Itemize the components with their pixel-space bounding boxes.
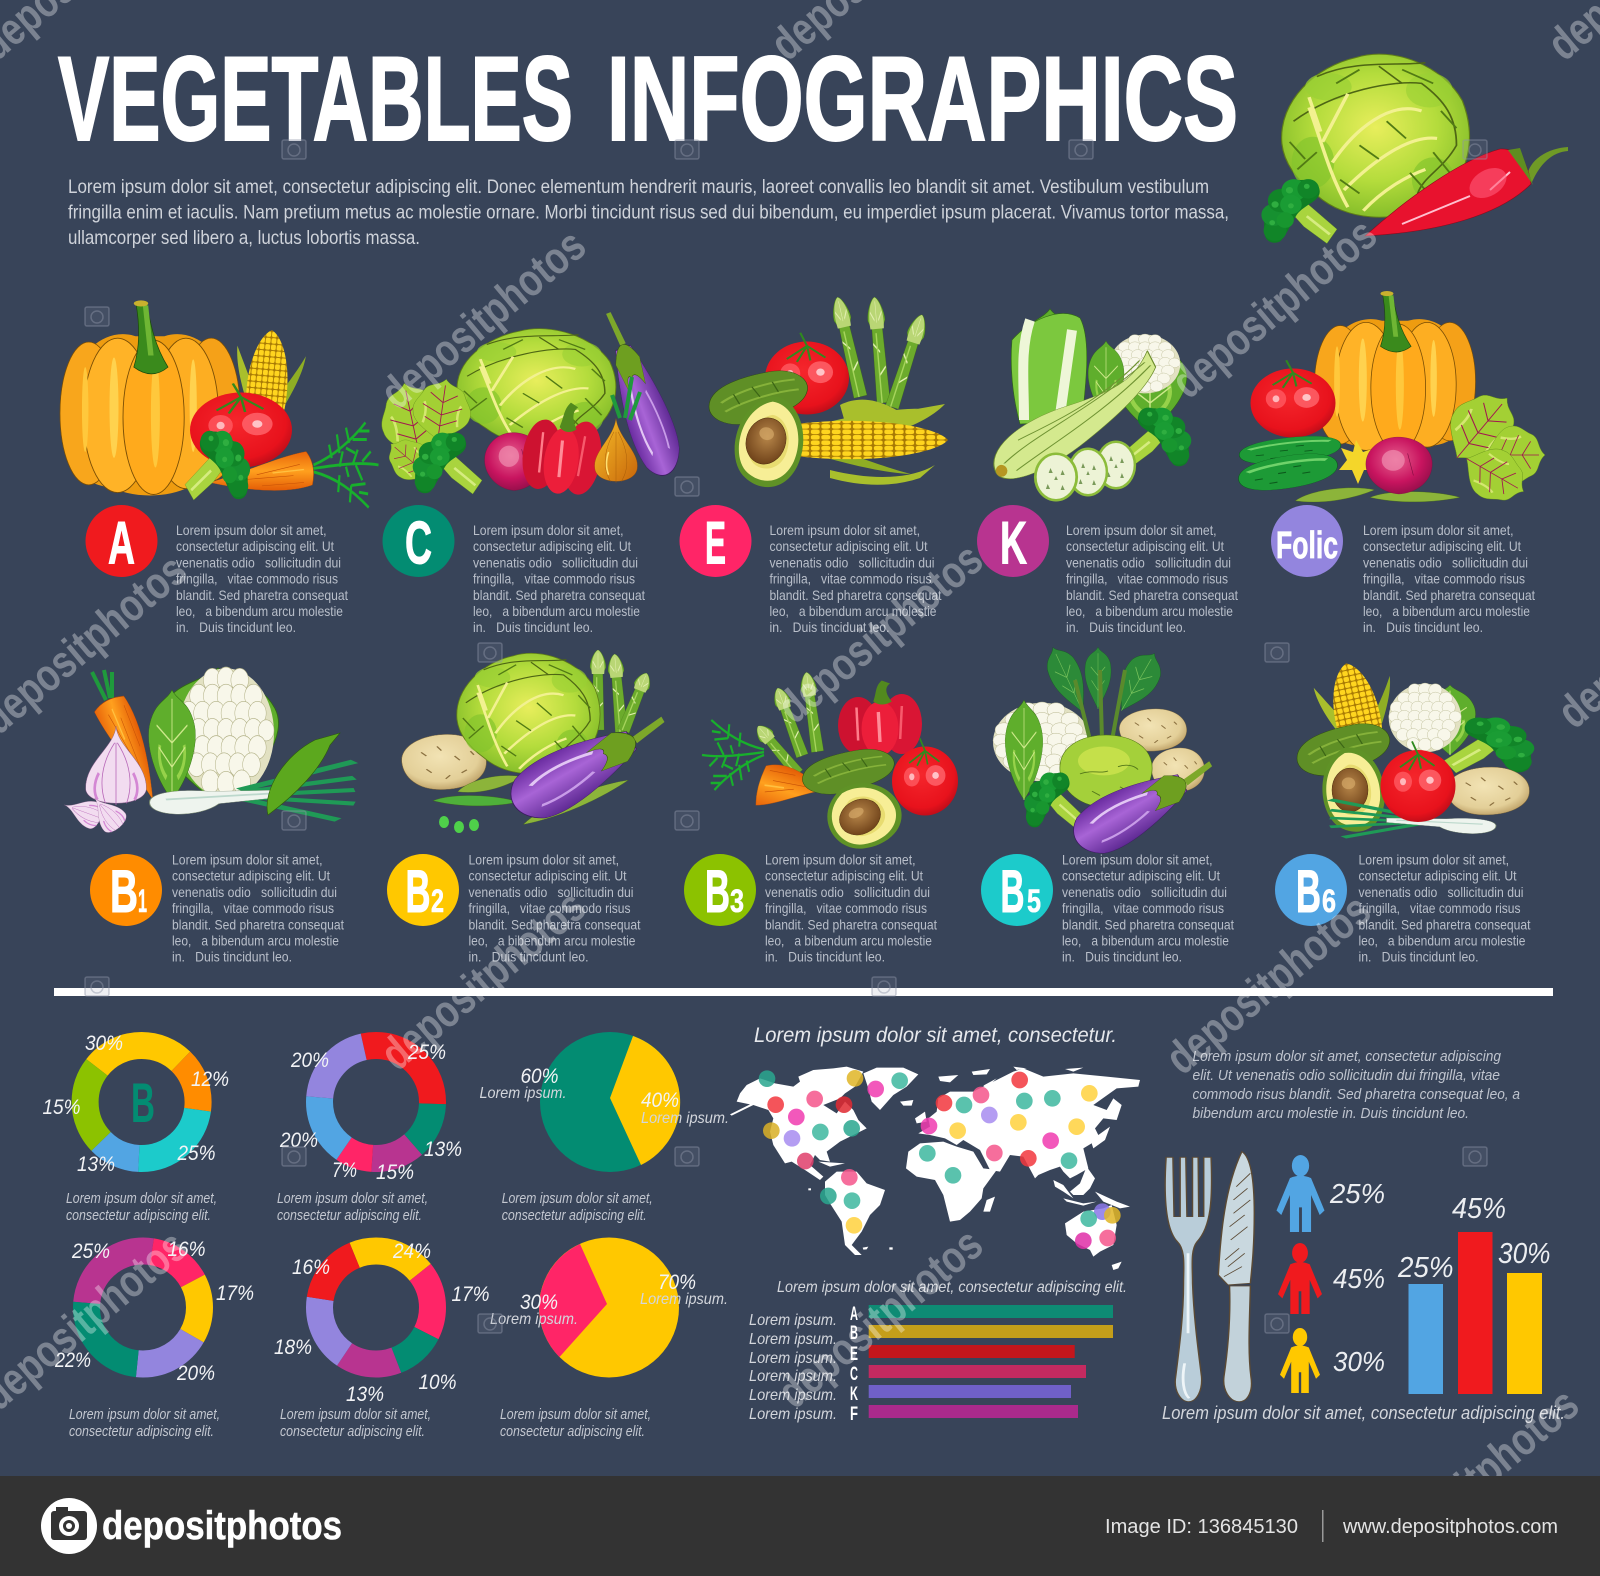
pie chart 2: 30% bbox=[520, 1291, 558, 1314]
horizontal bar chart: Lorem ipsum. bbox=[749, 1406, 837, 1423]
vitamin E text: consectetur adipiscing elit. Ut bbox=[770, 538, 928, 554]
vitamin K text bbox=[1066, 522, 1238, 635]
vegetables group: folic acid bbox=[1236, 291, 1545, 514]
vitamin B1 text: Lorem ipsum dolor sit amet, bbox=[172, 852, 322, 868]
watermark text: depositphotos bbox=[370, 879, 595, 1080]
vitamin B3 text: venenatis odio sollicitudin dui bbox=[765, 884, 930, 900]
pie chart 1: Lorem ipsum. bbox=[480, 1085, 566, 1102]
donut chart 2 caption: consectetur adipiscing elit. bbox=[277, 1208, 422, 1224]
donut chart 2 caption bbox=[277, 1191, 428, 1224]
donut chart 3: 17% bbox=[216, 1282, 254, 1305]
vitamin B2 badge: 2 bbox=[431, 883, 444, 919]
donut chart 1 caption bbox=[66, 1191, 217, 1224]
vitamin B5 text: venenatis odio sollicitudin dui bbox=[1062, 884, 1227, 900]
watermark text: depositphotos bbox=[1155, 883, 1380, 1084]
vitamin A text bbox=[176, 522, 348, 635]
donut chart 4 caption: Lorem ipsum dolor sit amet, bbox=[280, 1407, 431, 1423]
folic acid text: Lorem ipsum dolor sit amet, bbox=[1363, 522, 1514, 538]
footer image id: Image ID: 136845130 bbox=[1105, 1516, 1298, 1538]
world map with coloured dots bbox=[730, 1067, 1140, 1270]
vegetables group: vitamin B3 bbox=[702, 671, 958, 860]
vitamin B2 badge: B bbox=[406, 858, 430, 925]
donut chart 2: 20% bbox=[279, 1129, 318, 1152]
vitamin B3 text: in. Duis tincidunt leo. bbox=[765, 949, 885, 965]
vitamin K badge: K bbox=[1000, 510, 1027, 576]
vitamin B3 text bbox=[765, 852, 937, 965]
donut chart 4: 17% bbox=[452, 1283, 490, 1306]
pie chart 2 caption: Lorem ipsum dolor sit amet, bbox=[500, 1407, 651, 1423]
donut chart 1: vitamin B bbox=[42, 1032, 229, 1176]
donut chart 3 caption: consectetur adipiscing elit. bbox=[69, 1424, 214, 1440]
donut chart 4: 24% bbox=[392, 1240, 431, 1263]
icon: blue person with 25% bbox=[1276, 1155, 1385, 1232]
donut chart 4 bbox=[274, 1240, 490, 1406]
watermark text: depositphotos bbox=[1161, 207, 1386, 408]
donut chart 1: vitamin B: 15% bbox=[42, 1096, 80, 1119]
horizontal bar chart: Lorem ipsum. bbox=[749, 1368, 837, 1385]
pie chart 2: Lorem ipsum. bbox=[490, 1311, 578, 1328]
vitamin B5 text: in. Duis tincidunt leo. bbox=[1062, 949, 1182, 965]
vitamin B6 text: fringilla, vitae commodo risus bbox=[1358, 900, 1520, 916]
vitamin B3 badge: 3 bbox=[730, 883, 744, 919]
vegetables group: vitamin E bbox=[709, 295, 948, 495]
intro paragraph: fringilla enim et iaculis. Nam pretium metus ac molestie ornare. Morbi tincidunt risus sed dui bibendum, eu imperdiet ipsum placerat. Vivamus tortor massa, bbox=[68, 202, 1229, 224]
pie chart 2: 70% bbox=[658, 1271, 696, 1294]
vitamin C badge: C bbox=[405, 510, 432, 576]
vitamin B2 text bbox=[468, 852, 641, 965]
horizontal bar chart bbox=[749, 1279, 1127, 1425]
pie chart 2: Lorem ipsum. bbox=[640, 1291, 728, 1308]
vitamin B1 text: venenatis odio sollicitudin dui bbox=[172, 884, 337, 900]
folic acid text: blandit. Sed pharetra consequat bbox=[1363, 587, 1535, 603]
donut chart 1 caption: Lorem ipsum dolor sit amet, bbox=[66, 1191, 217, 1207]
bottom right caption: Lorem ipsum dolor sit amet, consectetur adipiscing elit. bbox=[1162, 1403, 1565, 1423]
vitamin B3 text: Lorem ipsum dolor sit amet, bbox=[765, 852, 916, 868]
right text block bbox=[1192, 1048, 1520, 1122]
vitamin B1 text: blandit. Sed pharetra consequat bbox=[172, 916, 344, 932]
pie chart 1 caption bbox=[502, 1191, 653, 1224]
folic acid text: leo, a bibendum arcu molestie bbox=[1363, 603, 1530, 619]
vertical bar chart bbox=[1397, 1193, 1550, 1394]
vitamin A text: fringilla, vitae commodo risus bbox=[176, 571, 338, 587]
footer logo bbox=[41, 1498, 342, 1554]
intro paragraph bbox=[68, 176, 1229, 249]
vitamin B5 text: leo, a bibendum arcu molestie bbox=[1062, 932, 1229, 948]
vegetables group: vitamin K bbox=[978, 309, 1191, 502]
vitamin B6 text: venenatis odio sollicitudin dui bbox=[1358, 884, 1524, 900]
pie chart 1: 60% bbox=[520, 1065, 558, 1088]
vitamin E text: Lorem ipsum dolor sit amet, bbox=[770, 522, 920, 538]
vitamin A badge: A bbox=[108, 510, 135, 576]
vitamin B6 text: consectetur adipiscing elit. Ut bbox=[1358, 868, 1517, 884]
illustration: cabbage, chili and broccoli bbox=[1261, 54, 1568, 243]
vitamin A text: in. Duis tincidunt leo. bbox=[176, 619, 296, 635]
vitamin B2 text: consectetur adipiscing elit. Ut bbox=[468, 868, 627, 884]
vitamin A text: venenatis odio sollicitudin dui bbox=[176, 554, 341, 570]
vitamin K text: consectetur adipiscing elit. Ut bbox=[1066, 538, 1224, 554]
vitamin E text: leo, a bibendum arcu molestie bbox=[770, 603, 937, 619]
vitamin B5 badge: B bbox=[1000, 858, 1024, 925]
title: INFOGRAPHICS bbox=[607, 32, 1238, 166]
donut chart 4: 10% bbox=[418, 1371, 456, 1394]
donut chart 3: 16% bbox=[168, 1238, 206, 1261]
donut chart 3 bbox=[54, 1238, 254, 1385]
pie chart 1: 40% bbox=[641, 1089, 679, 1112]
vitamin B3 text: blandit. Sed pharetra consequat bbox=[765, 916, 937, 932]
vitamin B1 text: leo, a bibendum arcu molestie bbox=[172, 932, 339, 948]
horizontal bar chart: A bbox=[850, 1304, 858, 1325]
vitamin B6 badge: B bbox=[1296, 858, 1321, 925]
vitamin E text: blandit. Sed pharetra consequat bbox=[770, 587, 942, 603]
vitamin B1 text: in. Duis tincidunt leo. bbox=[172, 949, 292, 965]
vitamin B5 text: consectetur adipiscing elit. Ut bbox=[1062, 868, 1220, 884]
vitamin B6 text: in. Duis tincidunt leo. bbox=[1358, 949, 1478, 965]
vitamin K text: Lorem ipsum dolor sit amet, bbox=[1066, 522, 1216, 538]
vitamin B2 text: leo, a bibendum arcu molestie bbox=[468, 932, 636, 948]
folic acid text: venenatis odio sollicitudin dui bbox=[1363, 554, 1528, 570]
vitamin B3 badge: B bbox=[705, 858, 730, 925]
vitamin A text: Lorem ipsum dolor sit amet, bbox=[176, 522, 326, 538]
vitamin B1 text bbox=[172, 852, 344, 965]
folic acid badge: Folic bbox=[1276, 525, 1338, 567]
pie chart 2 caption bbox=[500, 1407, 651, 1440]
vitamin B1 badge: B bbox=[110, 858, 138, 925]
donut chart 1 caption: consectetur adipiscing elit. bbox=[66, 1208, 211, 1224]
vitamin B1 text: consectetur adipiscing elit. Ut bbox=[172, 868, 330, 884]
vitamin A text: consectetur adipiscing elit. Ut bbox=[176, 538, 334, 554]
vitamin B2 text: Lorem ipsum dolor sit amet, bbox=[468, 852, 619, 868]
intro paragraph: ullamcorper sed libero a, luctus lobortis massa. bbox=[68, 227, 420, 249]
vitamin E badge: E bbox=[705, 510, 726, 576]
intro paragraph: Lorem ipsum dolor sit amet, consectetur adipiscing elit. Donec elementum hendrerit mauris, laoreet convallis leo blandit sit amet. Vestibulum vestibulum bbox=[68, 176, 1209, 198]
watermark text: depositphotos bbox=[370, 218, 595, 419]
donut chart 4: 18% bbox=[274, 1336, 312, 1359]
right text block: Lorem ipsum dolor sit amet, consectetur adipiscing bbox=[1192, 1048, 1502, 1065]
donut chart 1: vitamin B: 25% bbox=[177, 1142, 216, 1165]
horizontal bar chart: Lorem ipsum dolor sit amet, consectetur adipiscing elit. bbox=[777, 1279, 1127, 1296]
donut chart 3: 20% bbox=[176, 1362, 215, 1385]
vitamin B2 badge bbox=[387, 854, 459, 926]
donut chart 1: vitamin B: 30% bbox=[85, 1032, 123, 1055]
folic acid text: consectetur adipiscing elit. Ut bbox=[1363, 538, 1521, 554]
footer logo: depositphotos bbox=[102, 1504, 342, 1548]
vegetables group: vitamin B6 bbox=[1297, 655, 1534, 837]
vitamin K text: in. Duis tincidunt leo. bbox=[1066, 619, 1186, 635]
vitamin B2 text: blandit. Sed pharetra consequat bbox=[468, 916, 641, 932]
donut chart 3 caption bbox=[69, 1407, 220, 1440]
vitamin C text: venenatis odio sollicitudin dui bbox=[473, 554, 638, 570]
horizontal bar chart: B bbox=[850, 1323, 858, 1344]
donut chart 3 caption: Lorem ipsum dolor sit amet, bbox=[69, 1407, 220, 1423]
donut chart 1: vitamin B: 12% bbox=[191, 1068, 229, 1091]
pie chart 1 bbox=[480, 1032, 729, 1172]
vitamin C text: leo, a bibendum arcu molestie bbox=[473, 603, 640, 619]
vegetables group: vitamin B5 bbox=[993, 641, 1225, 865]
vitamin B2 text: venenatis odio sollicitudin dui bbox=[468, 884, 634, 900]
donut chart 4 caption: consectetur adipiscing elit. bbox=[280, 1424, 425, 1440]
icon: red person with 45%: 45% bbox=[1333, 1263, 1385, 1294]
donut chart 3: 22% bbox=[54, 1349, 91, 1372]
icon: blue person with 25%: 25% bbox=[1329, 1178, 1385, 1209]
vitamin B2 text: in. Duis tincidunt leo. bbox=[468, 949, 588, 965]
vitamin B6 badge: 6 bbox=[1322, 883, 1336, 919]
vitamin A text: leo, a bibendum arcu molestie bbox=[176, 603, 343, 619]
horizontal bar chart: Lorem ipsum. bbox=[749, 1387, 837, 1404]
vitamin A text: blandit. Sed pharetra consequat bbox=[176, 587, 348, 603]
horizontal bar chart: Lorem ipsum. bbox=[749, 1350, 837, 1367]
title bbox=[58, 32, 1238, 166]
vitamin K text: blandit. Sed pharetra consequat bbox=[1066, 587, 1238, 603]
vegetables group: vitamin B2 bbox=[402, 650, 678, 833]
vitamin B3 text: fringilla, vitae commodo risus bbox=[765, 900, 927, 916]
vitamin B3 text: consectetur adipiscing elit. Ut bbox=[765, 868, 923, 884]
donut chart 2 caption: Lorem ipsum dolor sit amet, bbox=[277, 1191, 428, 1207]
horizontal bar chart: K bbox=[850, 1384, 858, 1405]
vegetables group: vitamin B1 bbox=[60, 667, 355, 837]
horizontal bar chart: Lorem ipsum. bbox=[749, 1331, 837, 1348]
donut chart 2: 15% bbox=[376, 1161, 414, 1184]
pie chart 1: Lorem ipsum. bbox=[641, 1110, 729, 1127]
donut chart 2: 7% bbox=[332, 1159, 357, 1182]
icon: red person with 45% bbox=[1278, 1243, 1385, 1314]
pie chart 2 caption: consectetur adipiscing elit. bbox=[500, 1424, 645, 1440]
world map heading: Lorem ipsum dolor sit amet, consectetur. bbox=[754, 1024, 1117, 1047]
folic acid badge bbox=[1271, 505, 1343, 577]
vitamin B5 text: Lorem ipsum dolor sit amet, bbox=[1062, 852, 1212, 868]
vertical bar chart: 25% bbox=[1397, 1252, 1454, 1284]
vitamin K text: leo, a bibendum arcu molestie bbox=[1066, 603, 1233, 619]
vegetables group: vitamin A bbox=[60, 300, 379, 508]
vitamin C badge bbox=[382, 505, 454, 577]
vitamin B5 text bbox=[1062, 852, 1234, 965]
folic acid text: fringilla, vitae commodo risus bbox=[1363, 571, 1525, 587]
icon: yellow person with 30%: 30% bbox=[1333, 1346, 1385, 1377]
donut chart 2: 20% bbox=[290, 1049, 329, 1072]
vitamin B5 badge: 5 bbox=[1027, 883, 1041, 919]
vitamin B6 text bbox=[1358, 852, 1531, 965]
donut chart 4 caption bbox=[280, 1407, 431, 1440]
vitamin C text: fringilla, vitae commodo risus bbox=[473, 571, 635, 587]
vitamin A badge bbox=[86, 505, 158, 577]
donut chart 2: 13% bbox=[424, 1138, 462, 1161]
folic acid text: in. Duis tincidunt leo. bbox=[1363, 619, 1483, 635]
vitamin B3 badge bbox=[684, 854, 756, 926]
watermark camera icons bbox=[85, 140, 1487, 1333]
horizontal bar chart: Lorem ipsum. bbox=[749, 1312, 837, 1329]
watermark text: depositphotos bbox=[767, 532, 992, 733]
vitamin B5 badge bbox=[981, 854, 1053, 926]
donut chart 4: 16% bbox=[292, 1256, 330, 1279]
footer bar bbox=[0, 1476, 1600, 1576]
vitamin B6 text: leo, a bibendum arcu molestie bbox=[1358, 932, 1526, 948]
vitamin B1 badge bbox=[90, 854, 162, 926]
vitamin E text bbox=[770, 522, 942, 635]
donut chart 2: 25% bbox=[407, 1041, 446, 1064]
title: VEGETABLES bbox=[58, 32, 573, 166]
watermark text: depositphotos bbox=[767, 1217, 992, 1418]
vitamin B2 text: fringilla, vitae commodo risus bbox=[468, 900, 630, 916]
donut chart 3: 25% bbox=[71, 1240, 110, 1263]
vitamin C text: Lorem ipsum dolor sit amet, bbox=[473, 522, 624, 538]
donut chart 1: vitamin B: 13% bbox=[77, 1153, 115, 1176]
icon: yellow person with 30% bbox=[1280, 1328, 1385, 1393]
donut chart 2 bbox=[279, 1041, 462, 1184]
pie chart 1 caption: Lorem ipsum dolor sit amet, bbox=[502, 1191, 653, 1207]
right text block: elit. Ut venenatis odio sollicitudin dui fringilla, vitae bbox=[1192, 1067, 1500, 1084]
vitamin C text: blandit. Sed pharetra consequat bbox=[473, 587, 645, 603]
right text block: bibendum arcu molestie in. Duis tincidunt leo. bbox=[1192, 1105, 1469, 1122]
vitamin B1 text: fringilla, vitae commodo risus bbox=[172, 900, 334, 916]
vitamin C text: consectetur adipiscing elit. Ut bbox=[473, 538, 631, 554]
vitamin K badge bbox=[977, 505, 1049, 577]
vitamin E text: venenatis odio sollicitudin dui bbox=[770, 554, 934, 570]
vitamin B3 text: leo, a bibendum arcu molestie bbox=[765, 932, 932, 948]
vitamin K text: venenatis odio sollicitudin dui bbox=[1066, 554, 1231, 570]
horizontal bar chart: E bbox=[850, 1344, 858, 1365]
vitamin B1 badge: 1 bbox=[138, 883, 147, 919]
vegetables group: vitamin C bbox=[374, 305, 689, 499]
vertical bar chart: 30% bbox=[1498, 1238, 1550, 1270]
vitamin K text: fringilla, vitae commodo risus bbox=[1066, 571, 1228, 587]
horizontal bar chart: F bbox=[850, 1404, 858, 1425]
pie chart 2 bbox=[490, 1238, 728, 1378]
vitamin C text: in. Duis tincidunt leo. bbox=[473, 619, 593, 635]
donut chart 4: 13% bbox=[346, 1383, 384, 1406]
vitamin C text bbox=[473, 522, 645, 635]
folic acid text bbox=[1363, 522, 1535, 635]
footer website: www.depositphotos.com bbox=[1342, 1516, 1558, 1538]
horizontal bar chart: C bbox=[850, 1364, 858, 1385]
vertical bar chart: 45% bbox=[1452, 1193, 1506, 1225]
vitamin B6 text: blandit. Sed pharetra consequat bbox=[1358, 916, 1531, 932]
vitamin E text: fringilla, vitae commodo risus bbox=[770, 571, 932, 587]
vitamin E badge bbox=[680, 505, 752, 577]
vitamin B6 text: Lorem ipsum dolor sit amet, bbox=[1358, 852, 1509, 868]
vitamin E text: in. Duis tincidunt leo. bbox=[770, 619, 889, 635]
vitamin B5 text: fringilla, vitae commodo risus bbox=[1062, 900, 1224, 916]
vitamin B6 badge bbox=[1275, 854, 1347, 926]
pie chart 1 caption: consectetur adipiscing elit. bbox=[502, 1208, 647, 1224]
right text block: commodo risus blandit. Sed pharetra consequat leo, a bbox=[1192, 1086, 1520, 1103]
vitamin B5 text: blandit. Sed pharetra consequat bbox=[1062, 916, 1234, 932]
icon: fork and knife bbox=[1165, 1152, 1254, 1402]
donut chart 1: vitamin B: B bbox=[131, 1071, 155, 1134]
